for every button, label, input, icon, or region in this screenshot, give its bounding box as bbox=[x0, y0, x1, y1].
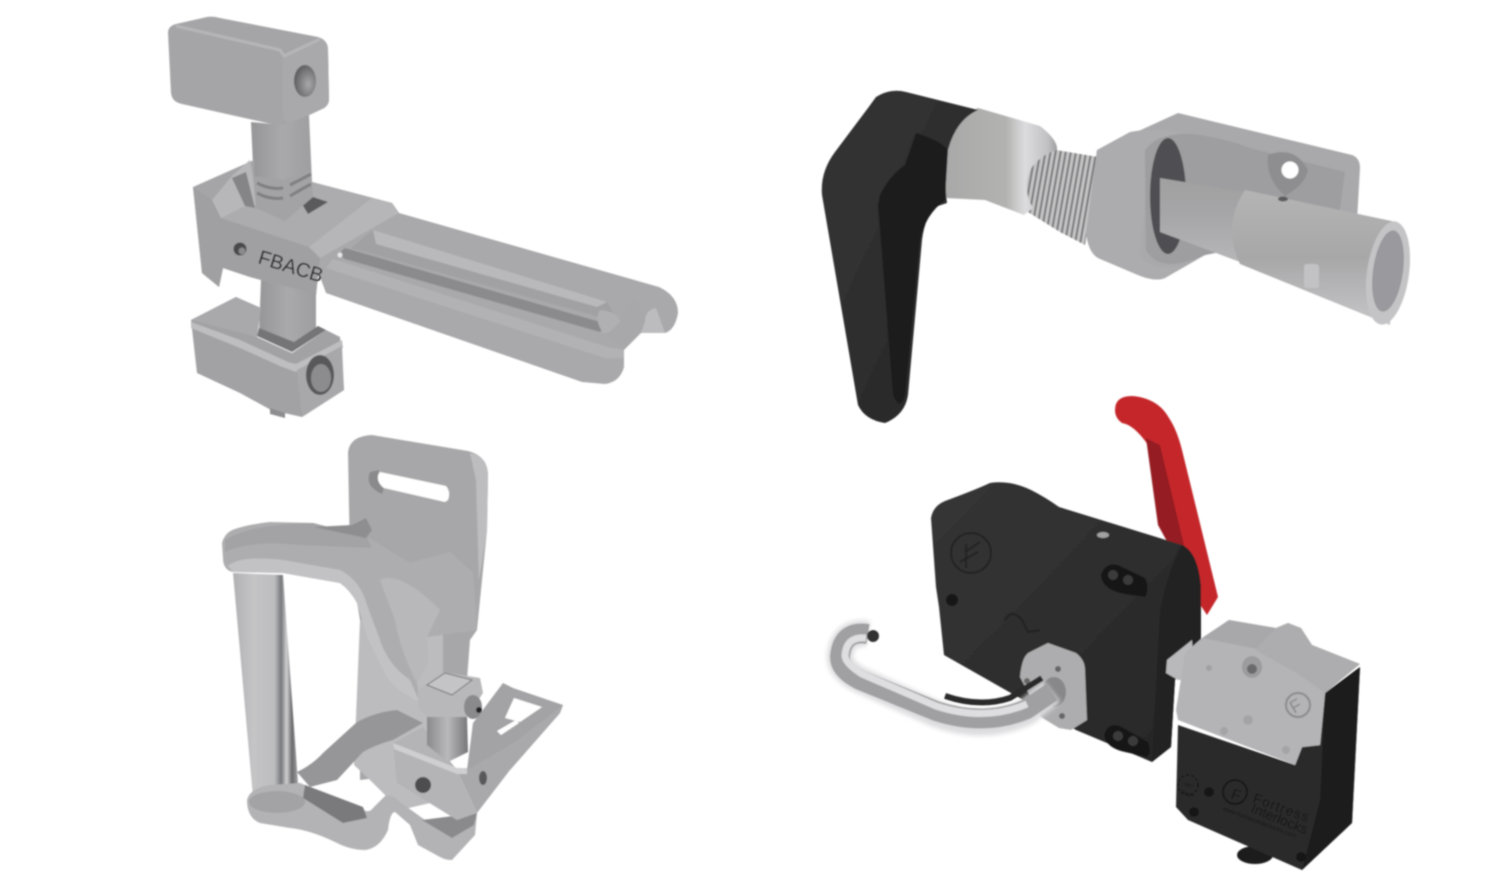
mounting plate with slot bbox=[348, 435, 488, 810]
grooved shaft section bbox=[253, 170, 313, 221]
Fortress Interlocks branding bbox=[1180, 781, 1312, 840]
red lever bbox=[1115, 396, 1218, 615]
Fortress Interlocks branding: 360° bbox=[1182, 781, 1194, 790]
bracket front yoke bbox=[1086, 130, 1345, 279]
bracket plate bbox=[1086, 113, 1360, 279]
spring thread bbox=[1024, 146, 1098, 245]
cube with bolt bbox=[418, 672, 483, 719]
shaft bbox=[1160, 178, 1245, 262]
product: FBACB bolt clamp with slotted arm bbox=[168, 17, 678, 418]
switch lower housing bbox=[1176, 667, 1360, 870]
black handle bbox=[822, 91, 978, 423]
base foot bbox=[247, 783, 477, 860]
upper handle arm bbox=[222, 518, 477, 703]
lower shaft bbox=[259, 280, 316, 347]
slotted arm bbox=[309, 203, 678, 384]
upper shaft bbox=[251, 115, 313, 228]
Fortress Interlocks branding: www.fortressinterlocks.com bbox=[1220, 805, 1297, 840]
handle mount plate bbox=[1020, 643, 1087, 730]
lower block bbox=[191, 297, 344, 418]
Fortress Interlocks branding: Reset bbox=[1180, 789, 1195, 800]
product: rod-handle latch with mounting plate bbox=[222, 435, 563, 860]
switch grey cover: F bbox=[1286, 695, 1306, 717]
Fortress Interlocks branding: Interlocks bbox=[1249, 800, 1310, 837]
metal collar bbox=[943, 108, 1057, 215]
switch grey cover bbox=[1176, 620, 1360, 765]
chrome rod bbox=[233, 573, 300, 807]
FBACB engraving: FBACB bbox=[256, 247, 326, 287]
metal tongue bbox=[1166, 640, 1195, 680]
top block bbox=[168, 17, 329, 126]
lower strap bbox=[297, 710, 423, 787]
Fortress Interlocks branding: F bbox=[1229, 786, 1243, 805]
chrome U-handle bbox=[840, 630, 1052, 723]
black lock body bbox=[931, 482, 1201, 762]
product: black interlock switch with red lever and chrome handle bbox=[840, 396, 1360, 870]
shaft under cube bbox=[427, 712, 468, 762]
frame latch bbox=[467, 683, 563, 770]
socket cylinder bbox=[1232, 190, 1416, 327]
Fortress Interlocks branding: Fortress bbox=[1251, 790, 1312, 825]
main body bbox=[193, 160, 399, 295]
product: black L-handle with threaded shaft and bracket bbox=[822, 91, 1416, 423]
jaw block bbox=[393, 705, 563, 820]
